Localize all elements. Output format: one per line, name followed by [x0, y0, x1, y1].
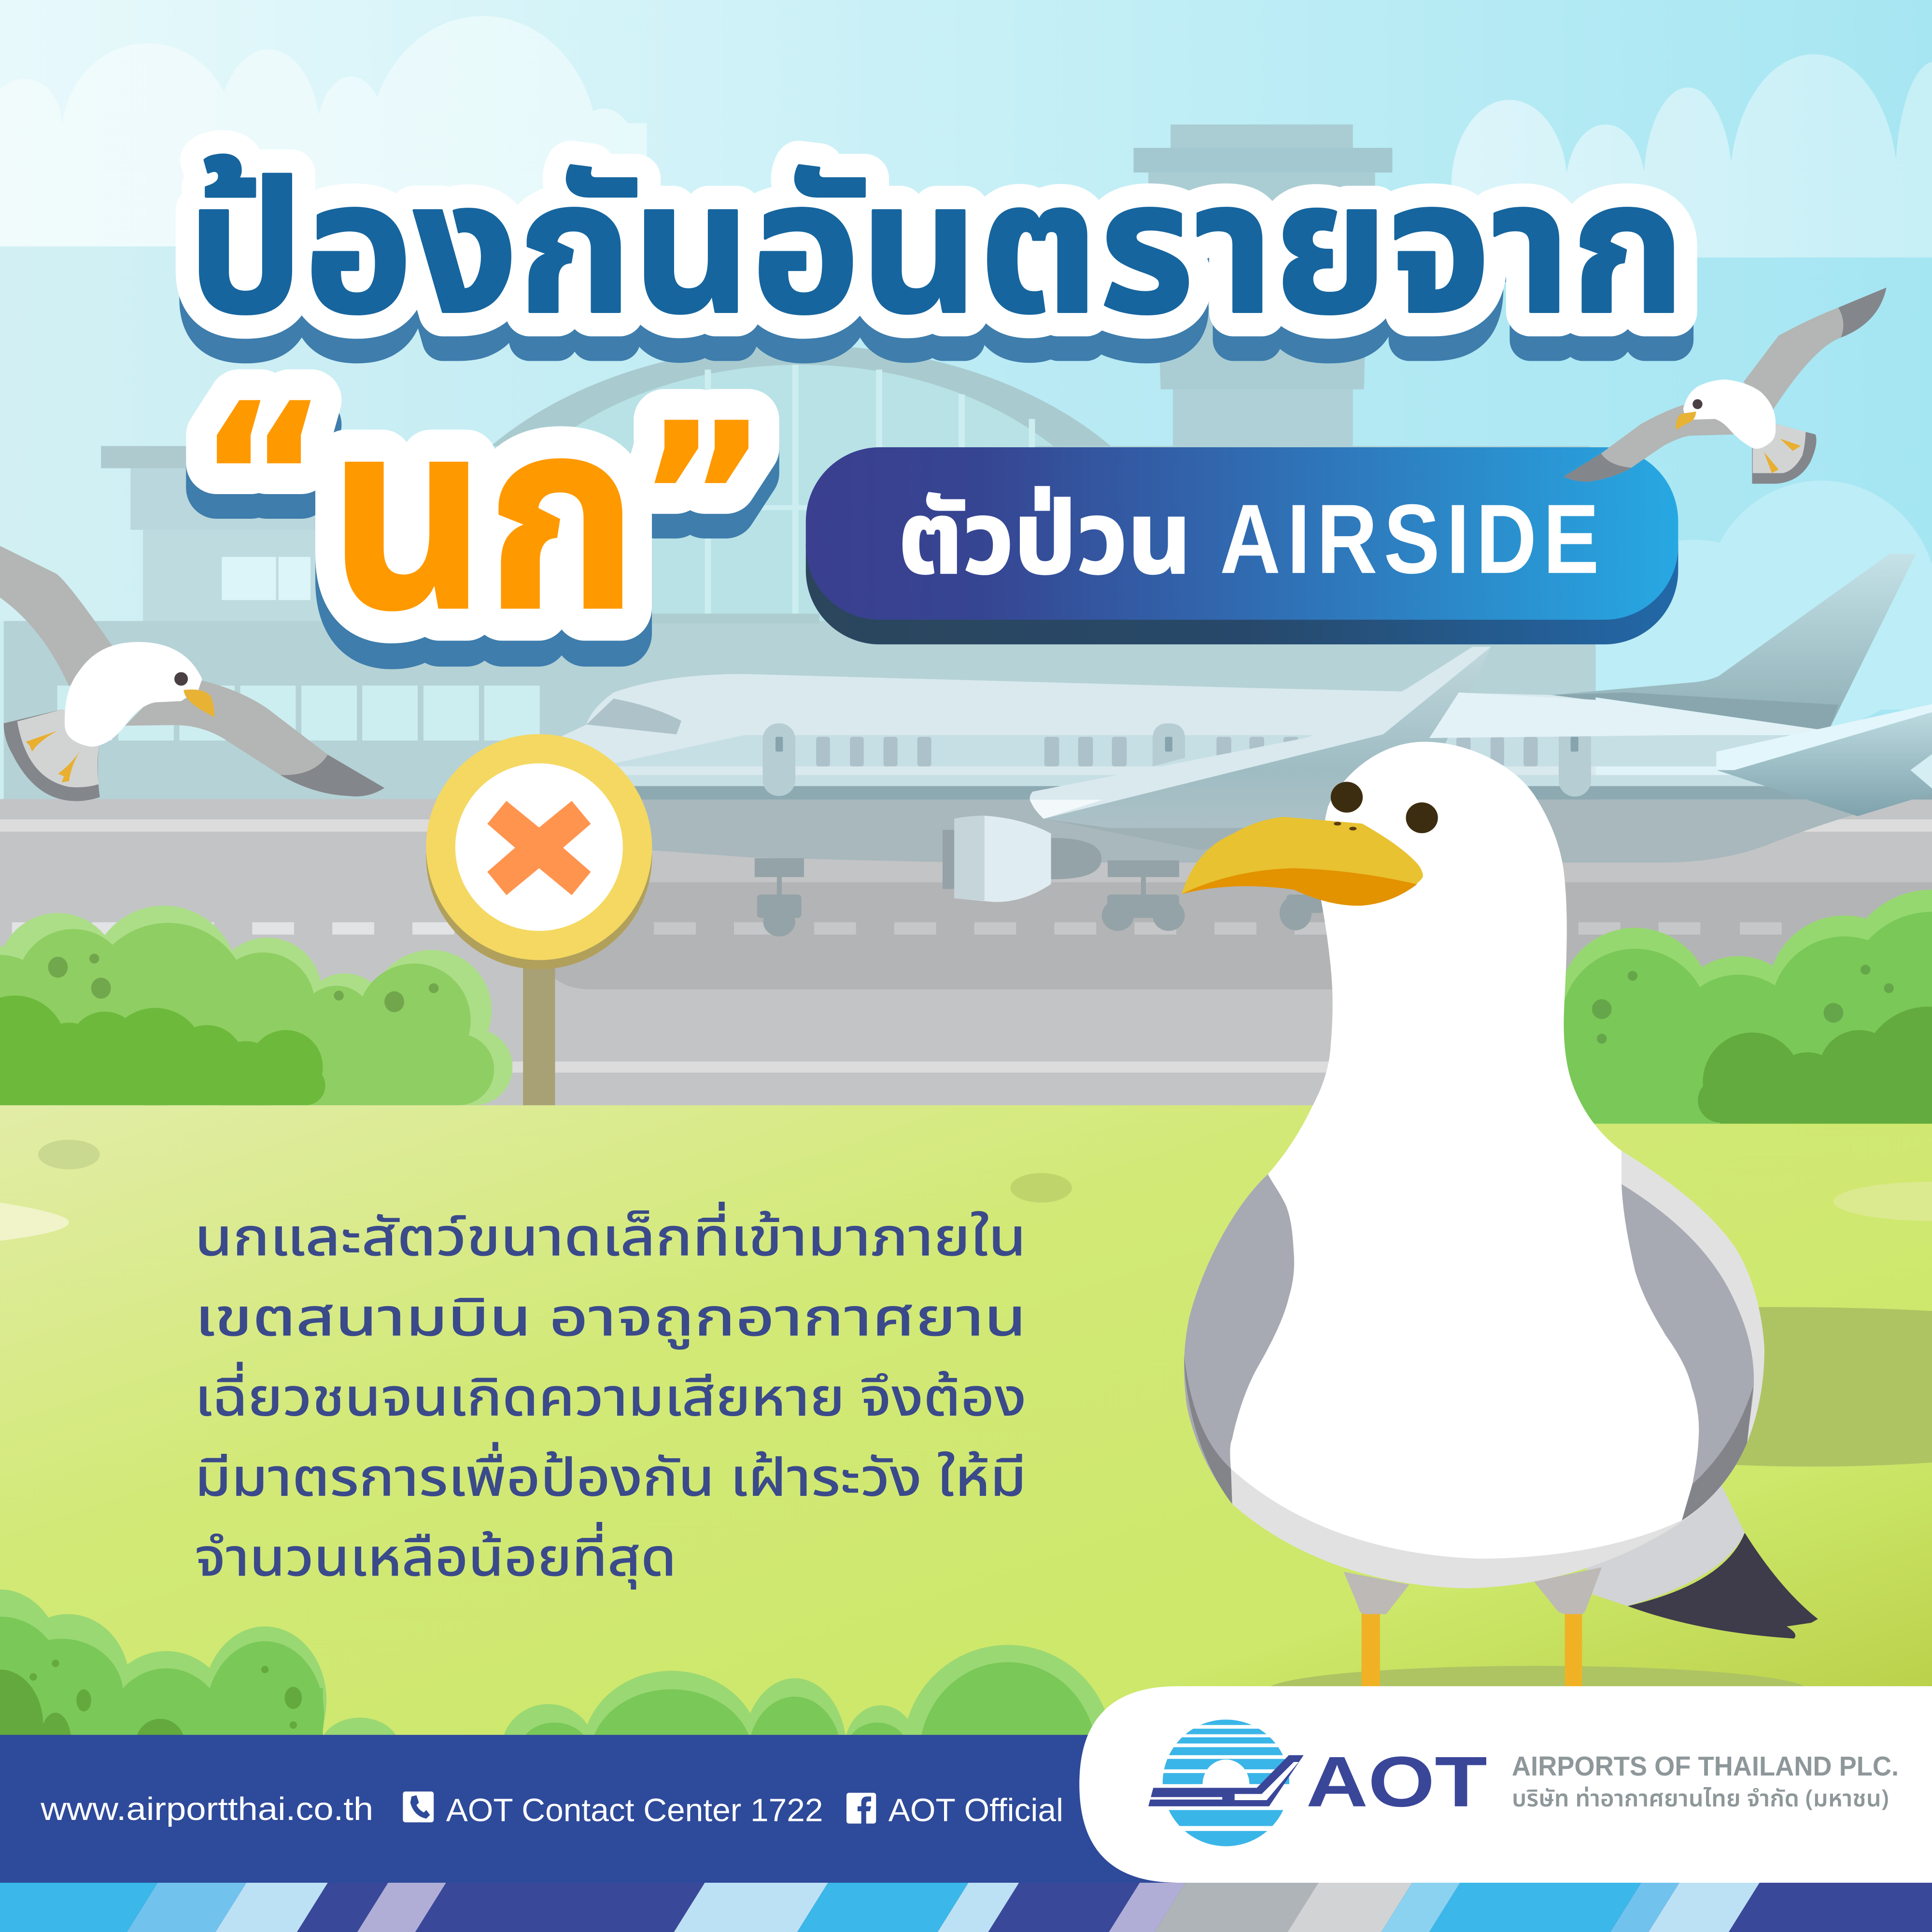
contact: website: www.airportthai.co.th [40, 1791, 373, 1827]
body text: จำนวนเหลือน้อยที่สุด [195, 1520, 677, 1600]
body text: เขตสนามบิน อาจถูกอากาศยาน [195, 1280, 1027, 1360]
arch hall [403, 345, 1199, 887]
title word: นก: นก [329, 354, 638, 752]
lower terminal windows [57, 685, 540, 740]
airport terminal and tower [0, 125, 1602, 887]
logo panel [1079, 1686, 1932, 1883]
contact: facebook name: AOT Official [888, 1792, 1063, 1828]
engine [943, 830, 955, 889]
doors [762, 723, 1591, 796]
small seagull right [1564, 287, 1887, 484]
passenger windows [816, 737, 1537, 767]
sign: no birds [426, 734, 652, 1105]
AOT wordmark: AOT [1306, 1742, 1487, 1822]
belly [531, 789, 1932, 863]
footer band [0, 1735, 1932, 1884]
company name Thai: บริษัท ท่าอากาศยานไทย จำกัด (มหาชน) [1512, 1782, 1889, 1817]
body [1230, 742, 1699, 1559]
title word: นก: ” [636, 380, 769, 616]
icon: facebook [846, 1793, 876, 1824]
eyes [1331, 782, 1363, 812]
grass field [0, 1105, 1932, 1746]
stabiliser [1716, 712, 1932, 816]
title: ป้องกันอันตรายจาก [187, 116, 1686, 395]
right shrub [1559, 890, 1932, 1142]
left shrub [0, 906, 512, 1115]
company name English: AIRPORTS OF THAILAND PLC. [1512, 1751, 1899, 1781]
clouds [0, 16, 1932, 727]
body text [195, 1200, 1027, 1600]
icon: phone [403, 1791, 434, 1822]
small seagull wing over pill [1564, 424, 1664, 482]
title word: นก: “ [196, 384, 329, 621]
left building [101, 446, 323, 468]
runway [0, 799, 1932, 1106]
title word: นก: นก [329, 328, 638, 726]
title: ป้องกันอันตรายจาก [187, 144, 1686, 424]
tail [1577, 1485, 1745, 1606]
body text: เฉี่ยวชนจนเกิดความเสียหาย จึงต้อง [195, 1360, 1027, 1440]
title: ป้องกันอันตรายจาก [187, 116, 1686, 395]
landing gear [755, 858, 1323, 937]
decorative stripes [0, 1883, 1932, 1932]
contact: call center: AOT Contact Center 1722 [446, 1792, 823, 1828]
control tower [1134, 125, 1392, 463]
wings [1184, 1174, 1294, 1504]
title word: นก: นก [329, 328, 638, 726]
outer rim [1184, 1109, 1764, 1588]
legs [1362, 1608, 1380, 1689]
body text: มีมาตรการเพื่อป้องกัน เฝ้าระวัง ให้มี [195, 1440, 1027, 1520]
tail fin [1552, 554, 1916, 729]
wing [1044, 647, 1491, 850]
airplane [531, 554, 1932, 937]
title word: นก: ” [636, 404, 769, 641]
title word: นก [196, 328, 769, 752]
body text: นกและสัตว์ขนาดเล็กที่เข้ามาภายใน [195, 1200, 1027, 1279]
subtitle pill [806, 447, 1678, 644]
small seagull left [0, 546, 384, 801]
beak [1182, 817, 1423, 906]
large seagull [1182, 742, 1818, 1689]
AOT emblem [1148, 1719, 1304, 1847]
fuselage [542, 674, 1932, 800]
bottom shrubs [0, 1590, 1113, 1854]
title word: นก: “ [196, 360, 329, 597]
subtitle pill: AIRSIDE [1220, 484, 1606, 594]
subtitle pill: ตัวป่วน [898, 466, 1191, 619]
